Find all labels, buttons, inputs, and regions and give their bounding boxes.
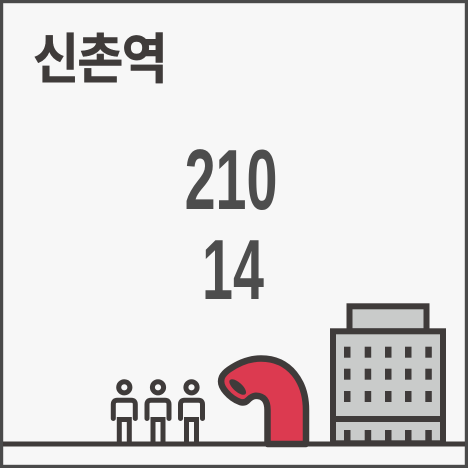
title: station name: 신촌역 — [33, 30, 166, 90]
building roof — [350, 306, 426, 331]
ground line — [3, 442, 465, 446]
icon: building — [333, 306, 443, 443]
number: 14: 14 — [202, 223, 264, 318]
icon: red subway exit vent — [221, 358, 306, 444]
icon: person 2 — [147, 382, 169, 442]
icon: person 1 — [113, 382, 135, 442]
building body — [333, 331, 443, 443]
icon: person 3 — [180, 382, 202, 442]
number: 210: 210 — [185, 133, 277, 228]
icon: three people — [113, 382, 202, 442]
building band and windows — [336, 347, 440, 443]
